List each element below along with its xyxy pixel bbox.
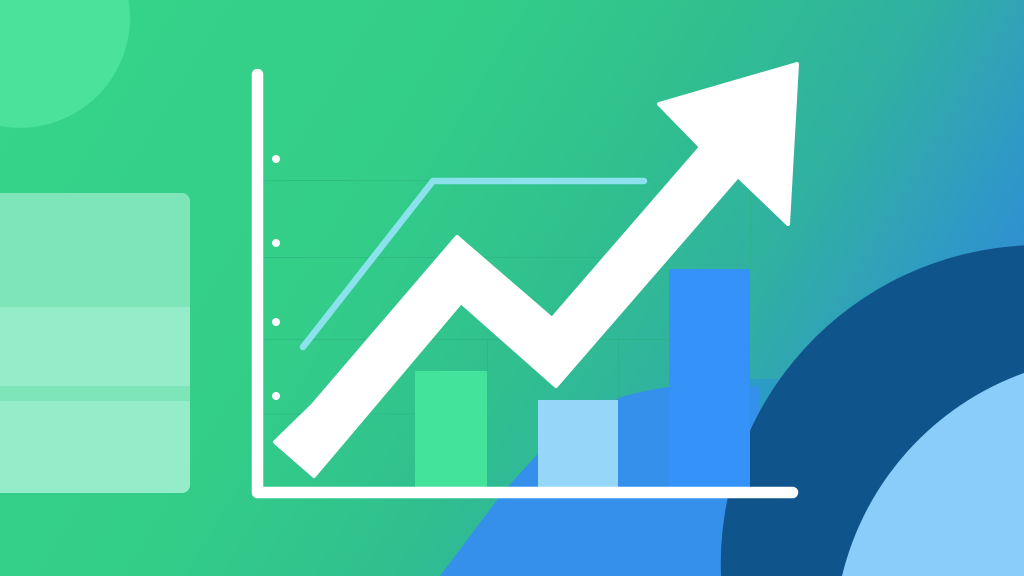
panel band upper — [0, 307, 190, 386]
inner light blue circle — [842, 373, 1024, 576]
left translucent panel — [0, 193, 190, 493]
top-left corner circle — [0, 0, 130, 128]
bar: light blue — [538, 400, 618, 487]
large dark blue circle — [721, 245, 1024, 576]
bar: tall blue — [669, 269, 750, 487]
bar: green — [415, 371, 487, 487]
teal block behind bars — [740, 379, 800, 449]
panel band lower — [0, 401, 190, 493]
blue diagonal shape — [440, 387, 760, 576]
y axis tick dots — [272, 155, 280, 400]
grid lines — [263, 180, 750, 414]
y axis and x axis — [258, 74, 792, 492]
secondary light-blue line — [303, 181, 644, 347]
white rising arrow — [275, 64, 797, 476]
